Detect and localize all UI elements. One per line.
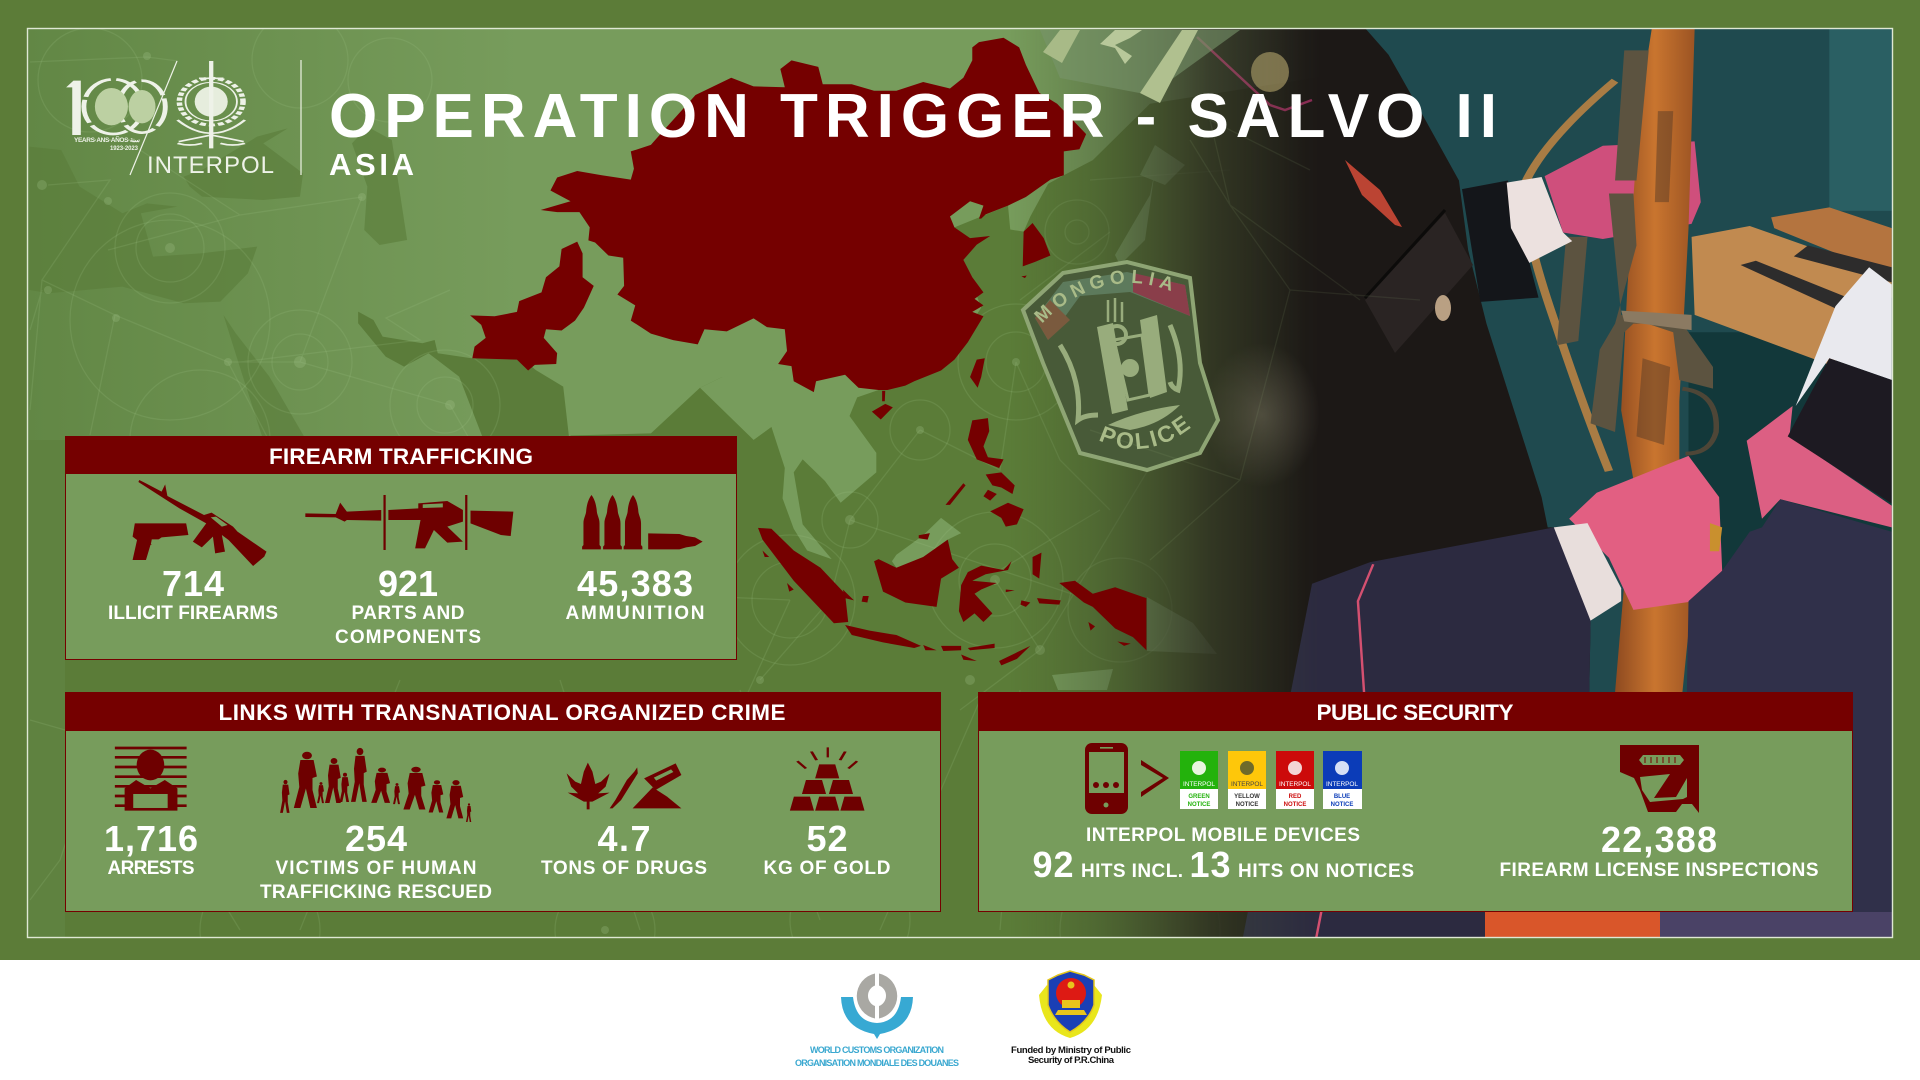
title: OPERATION TRIGGER - SALVO II — [329, 82, 1497, 151]
lower hand — [1569, 456, 1722, 610]
patch: Mongolia police: MONGOLIA — [1034, 270, 1171, 323]
icons: pistol and assault rifle — [133, 480, 267, 566]
logo: INTERPOL 100 years and emblem: 1923-2023 — [110, 146, 139, 152]
stat: ammunition — [566, 563, 704, 624]
panel: public security — [978, 692, 1853, 912]
background map and network — [28, 29, 1210, 937]
stat: gold — [764, 818, 890, 879]
icon: blue notice: BLUE — [1334, 794, 1350, 800]
stat: drugs — [541, 818, 707, 879]
patch soyombo symbol — [1097, 315, 1167, 414]
icon: gold bars — [790, 747, 865, 811]
icon: yellow notice: YELLOW — [1234, 794, 1260, 800]
blue jacket — [1682, 499, 1892, 944]
patch: Mongolia police — [1020, 260, 1220, 472]
stat: mobile devices — [1032, 825, 1414, 885]
icon: yellow notice — [1228, 751, 1266, 809]
stat: gold: KG OF GOLD — [764, 858, 890, 879]
China and Mongolia — [541, 38, 1086, 392]
stat: parts and components: COMPONENTS — [335, 627, 481, 648]
rifle stock — [1615, 29, 1695, 692]
upper sleeve — [1462, 180, 1539, 302]
icon: green notice — [1180, 751, 1218, 809]
stat: arrests — [104, 818, 198, 879]
icon: green notice: GREEN — [1188, 794, 1210, 800]
stat: illicit firearms — [108, 563, 278, 624]
stat: licence inspections — [1500, 819, 1818, 881]
stat: victims rescued: 254 — [345, 818, 407, 859]
chest badge — [1345, 160, 1402, 227]
logo: Ministry of Public Security of PR China — [1011, 971, 1131, 1066]
stat: drugs: TONS OF DRUGS — [541, 858, 707, 879]
patch: Mongolia police: POLICE — [1100, 415, 1191, 450]
lapel piping — [1197, 37, 1312, 110]
icon: blue notice: NOTICE — [1331, 802, 1353, 808]
stat: parts and components: PARTS AND — [352, 603, 464, 624]
stat: illicit firearms: ILLICIT FIREARMS — [108, 603, 278, 624]
collar medal — [1251, 52, 1289, 92]
Papua — [1059, 581, 1146, 650]
icon: rifle parts — [305, 495, 513, 550]
icon: group of trafficking victims — [280, 748, 471, 822]
icon: ammunition — [582, 495, 703, 549]
Pakistan — [470, 242, 594, 370]
lower sleeve — [1242, 527, 1591, 944]
logo: World Customs Organization: WORLD CUSTOMS ORGANIZATION — [810, 1045, 944, 1055]
icon: yellow notice: NOTICE — [1236, 802, 1258, 808]
Borneo — [874, 540, 959, 607]
rifle sling — [1525, 81, 1615, 471]
stat: illicit firearms: 714 — [162, 563, 224, 604]
heading: links: LINKS WITH TRANSNATIONAL ORGANIZED CRIME — [218, 700, 786, 725]
stat: mobile devices: HITS ON NOTICES — [1238, 861, 1414, 882]
land seen through the photo: Japan, Russia coast, New Guinea — [1052, 145, 1217, 690]
icon: red notice: RED — [1289, 794, 1302, 800]
heading: public security: PUBLIC SECURITY — [1316, 700, 1514, 725]
highlighted countries — [470, 38, 1146, 665]
jacket highlight — [1218, 358, 1310, 472]
icon: mobile phone — [1085, 743, 1128, 814]
stat: mobile devices: 13 — [1190, 844, 1230, 885]
logo: INTERPOL 100 years and emblem: YEARS·ANS·AÑOS·سنة — [74, 135, 141, 144]
icon: blue notice — [1323, 751, 1362, 809]
network over the photo — [1090, 120, 1420, 560]
upper hand — [1545, 141, 1701, 239]
stat: parts and components — [335, 563, 481, 648]
icon: mugshot — [115, 747, 187, 811]
stat: licence inspections: FIREARM LICENSE INSPECTIONS — [1500, 860, 1818, 881]
icon: red notice: INTERPOL — [1279, 781, 1311, 788]
stat: gold: 52 — [806, 818, 848, 859]
stat: arrests: 1,716 — [104, 818, 198, 859]
wooden benches — [1692, 226, 1892, 367]
Sulawesi — [959, 561, 1012, 622]
stat: drugs: 4.7 — [598, 818, 650, 859]
panel: links with transnational organized crime — [65, 692, 941, 912]
uniform jacket — [1036, 29, 1590, 937]
Hainan and Taiwan — [872, 358, 985, 419]
stat: victims rescued: TRAFFICKING RESCUED — [260, 882, 492, 903]
panel: firearm trafficking — [65, 436, 737, 660]
photo: officer holding rifle — [1020, 29, 1892, 937]
South Korea — [1021, 223, 1050, 278]
subtitle: ASIA — [329, 147, 414, 182]
logo: Ministry of Public Security of PR China: Funded by Ministry of Public — [1011, 1045, 1131, 1056]
stat: licence inspections: 22,388 — [1601, 819, 1717, 860]
logo: Ministry of Public Security of PR China: Security of P.R.China — [1028, 1055, 1115, 1066]
papers and book — [1796, 267, 1892, 406]
logo: World Customs Organization — [795, 974, 959, 1068]
icon: cannabis, syringe and razor — [567, 763, 681, 809]
icon: green notice: NOTICE — [1188, 802, 1210, 808]
icon: red notice — [1276, 751, 1314, 809]
Sumatra and Java — [758, 528, 1030, 665]
stat: victims rescued — [260, 818, 492, 903]
orange strip below panels — [1485, 912, 1660, 938]
stat: victims rescued: VICTIMS OF HUMAN — [276, 858, 476, 879]
Philippines — [946, 418, 1024, 527]
stat: arrests: ARRESTS — [108, 858, 194, 879]
pocket flap — [1365, 213, 1473, 353]
logo: INTERPOL 100 years and emblem: INTERPOL — [147, 152, 274, 179]
pocket button — [1435, 295, 1451, 321]
stat: mobile devices: INTERPOL MOBILE DEVICES — [1086, 825, 1360, 846]
epaulette stripes — [1043, 30, 1080, 63]
shoulder strap — [1040, 30, 1240, 95]
stat: mobile devices: HITS INCL. — [1081, 861, 1183, 882]
logo: INTERPOL 100 years and emblem — [66, 61, 274, 179]
icon: chevron arrow — [1141, 760, 1169, 797]
icon: blue notice: INTERPOL — [1326, 781, 1358, 788]
teal wall — [1366, 29, 1892, 912]
stat: ammunition: 45,383 — [577, 563, 693, 604]
cuffs — [1507, 177, 1572, 263]
heading: firearm trafficking: FIREARM TRAFFICKING — [269, 444, 533, 469]
icon: firearm licence — [1620, 745, 1699, 813]
stat: ammunition: AMMUNITION — [566, 603, 704, 624]
stat: mobile devices: 92 — [1032, 844, 1074, 885]
icon: green notice: INTERPOL — [1183, 781, 1215, 788]
icon: yellow notice: INTERPOL — [1231, 781, 1263, 788]
book-hand — [1747, 406, 1892, 527]
logo: World Customs Organization: ORGANISATION MONDIALE DES DOUANES — [795, 1058, 959, 1068]
stat: parts and components: 921 — [378, 563, 438, 604]
icon: red notice: NOTICE — [1284, 802, 1306, 808]
